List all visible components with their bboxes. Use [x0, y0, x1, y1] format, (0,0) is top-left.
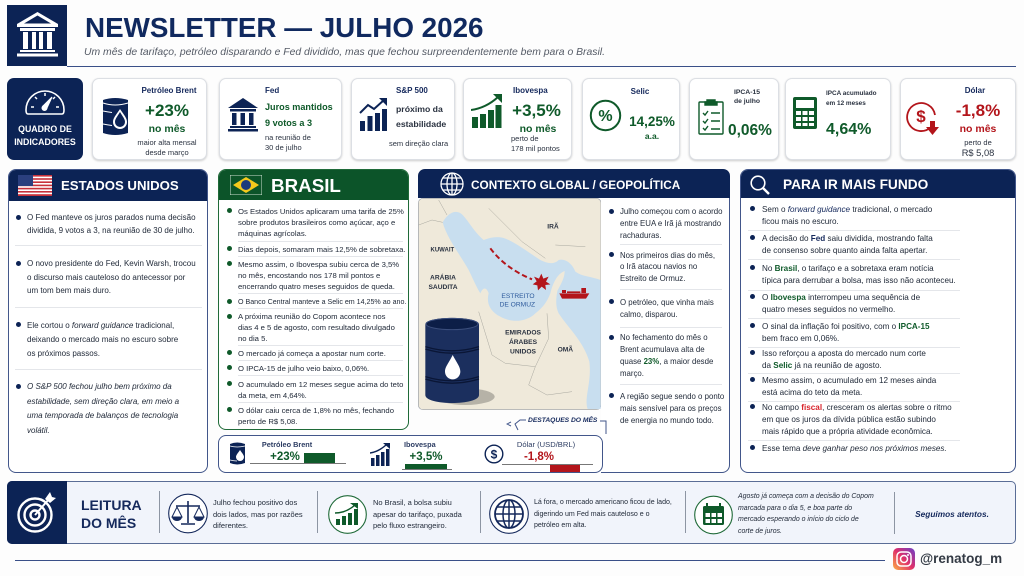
bullet list: da Selic já na reunião de agosto.: [762, 361, 882, 370]
card: dólar: [900, 78, 1016, 160]
bullet list: Mesmo assim, o Ibovespa subiu cerca de 3,5%: [238, 260, 399, 268]
card: fed: [219, 78, 342, 160]
bullet list: Julho começou com o acordo: [620, 207, 722, 216]
item: ibovespa: +3,5%: [410, 451, 442, 463]
bullet list: No Brasil, o tarifaço e a sobretaxa eram notícia: [762, 264, 934, 273]
map labels: [428, 222, 573, 355]
card: ibovespa: [463, 78, 572, 160]
text: [265, 86, 333, 152]
text: no mês: [149, 123, 185, 135]
bullet list: [748, 204, 960, 453]
icon: us flag: [18, 175, 52, 196]
route: [490, 248, 532, 279]
text: [534, 497, 672, 532]
bullet 1: [16, 215, 21, 220]
text 4: O S&P 500 fechou julho bem próximo da: [27, 382, 172, 391]
bullet list: o Irã atacou navios no: [620, 262, 697, 271]
title: CONTEXTO GLOBAL / GEOPOLÍTICA: [471, 178, 680, 192]
bullet list: em que os juros da dívida pública estão subindo: [762, 415, 936, 424]
bullet list: encerrando quatro meses seguidos de queda.: [238, 282, 395, 290]
text: no mês: [520, 123, 556, 135]
note: sem direção clara: [389, 139, 448, 148]
text 4: [27, 382, 179, 435]
icon: globe: [440, 172, 464, 196]
heading: [219, 170, 408, 200]
value: 14,25%: [629, 114, 675, 129]
text 4: uma temporada de balanços de tecnologia: [27, 411, 178, 420]
icon: globe: [489, 494, 529, 534]
title: IPCA acumulado: [826, 90, 877, 97]
title: BRASIL: [271, 175, 341, 196]
bullet list: Os Estados Unidos aplicaram uma tarifa de 25%: [238, 206, 404, 216]
bullet list: mais sensível para os preços: [620, 404, 722, 413]
label: [14, 124, 76, 147]
note: perto de: [511, 134, 539, 143]
text: [956, 86, 1000, 158]
text: Juros mantidos: [265, 102, 333, 112]
item: petróleo brent: +23%: [270, 451, 300, 463]
bullet list: O Ibovespa interrompeu uma sequência de: [762, 293, 920, 302]
text: Agosto já começa com a decisão do Copom: [738, 493, 874, 500]
text 3: Ele cortou o forward guidance tradicional,: [27, 321, 174, 330]
bullet list: ficou mais no escuro.: [762, 216, 839, 226]
text 2: [27, 259, 196, 295]
note: 178 mil pontos: [511, 144, 560, 153]
panel: quadro de indicadores: [7, 78, 83, 160]
icon: oil barrel: [425, 318, 479, 403]
text: digerindo um Fed mais cauteloso e o: [534, 510, 650, 518]
icon: green rising chart: [471, 94, 502, 128]
map labels: KUWAIT: [430, 248, 454, 254]
title: IPCA-15: [734, 89, 760, 96]
panel: brasil: [218, 169, 409, 430]
text: estabilidade: [396, 118, 446, 128]
text: no mês: [960, 123, 996, 135]
bullet list: O acumulado em 12 meses segue acima do teto: [238, 380, 403, 389]
map labels: DE ORMUZ: [500, 302, 535, 309]
text: No Brasil, a bolsa subiu: [373, 498, 452, 507]
bullet list: Esse tema deve ganhar peso nos próximos meses.: [762, 444, 947, 453]
title: ESTADOS UNIDOS: [61, 178, 179, 193]
bullet list: da meta, em 4,64%.: [238, 391, 307, 400]
text: Ibovespa: [513, 86, 548, 95]
panel: para ir mais fundo: [740, 169, 1016, 473]
value: 0,06%: [728, 122, 772, 139]
text: petróleo em alta.: [534, 522, 586, 529]
bullet list: março.: [620, 369, 644, 378]
title: [826, 90, 877, 107]
panel: leitura do mês: [7, 481, 1016, 544]
text 2: o discurso mais cauteloso do antecessor por: [27, 273, 185, 282]
icon: brazil flag: [230, 175, 262, 195]
text: +23%: [145, 101, 189, 120]
text: desde março: [145, 148, 189, 157]
bullet list: O Banco Central manteve a Selic em 14,25% ao ano.: [238, 298, 406, 306]
text: [213, 497, 303, 532]
text: +3,5%: [512, 101, 561, 120]
icon: dollar falling: $: [916, 107, 926, 126]
icon: clipboard: [698, 99, 724, 135]
card: s&p 500: [351, 78, 455, 160]
value: [629, 114, 675, 141]
bullet list: típica para derrubar a bolsa, mas isso não aconteceu.: [762, 276, 956, 285]
bullet list: quase 23%, a maior desde: [620, 357, 713, 366]
text: [373, 497, 462, 532]
bullet list: No fechamento do mês o: [620, 333, 708, 342]
map labels: ESTREITO: [501, 293, 535, 300]
icon: chart: [370, 443, 390, 466]
text: Julho fechou positivo dos: [213, 498, 297, 507]
footer rule: [15, 560, 885, 561]
title: PARA IR MAIS FUNDO: [783, 177, 928, 192]
bullet list: A próxima reunião do Copom acontece nos: [238, 312, 385, 321]
icon: scale: [168, 493, 208, 534]
item: dólar: [502, 440, 593, 472]
text: apesar do tarifaço, puxada: [373, 510, 462, 518]
bullet list: Sem o forward guidance tradicional, o mercado: [762, 204, 932, 214]
icon: calendar: [694, 495, 733, 535]
icon: dollar: [484, 444, 504, 464]
item: ibovespa: [402, 440, 452, 470]
bullet list: no dia 5.: [238, 334, 268, 343]
text: perto de: [964, 138, 992, 147]
bullet list: O IPCA-15 de julho veio baixo, 0,06%.: [238, 364, 369, 373]
bullet list: O petróleo, que vinha mais: [620, 298, 714, 307]
value: 4,64%: [826, 121, 871, 138]
map labels: UNIDOS: [510, 348, 537, 355]
text: S&P 500: [396, 86, 428, 95]
text: na reunião de: [265, 133, 311, 142]
bullet list: [609, 207, 724, 425]
icon: rising chart: [359, 98, 387, 131]
card: ipca acumulado: [785, 78, 891, 160]
shadow: [436, 388, 495, 405]
bullet list: mais rápido que a própria atividade econômica.: [762, 427, 933, 436]
title: de julho: [734, 98, 760, 105]
text: [137, 86, 197, 157]
icon: percent: %: [598, 108, 613, 125]
bullet list: Mesmo assim, o acumulado em 12 meses ainda: [762, 376, 936, 385]
icon: magnifier: [750, 175, 770, 195]
text 1: [27, 213, 196, 235]
map: estreito de ormuz: [418, 198, 601, 410]
title: [734, 89, 760, 105]
bullet list: rachaduras.: [620, 231, 661, 240]
icon: dollar: $: [491, 448, 498, 462]
subtitle: Um mês de tarifaço, petróleo disparando e Fed dividido, mas que fechou surpreendentemente bem para o Brasil.: [84, 47, 605, 58]
bullet list: máquinas agrícolas.: [238, 229, 307, 238]
text: dois lados, mas por razões: [213, 510, 303, 518]
panel: estados unidos: [8, 169, 208, 473]
bullet list: O mercado já começa a apostar num corte.: [238, 349, 386, 358]
icon: calculator: [793, 97, 817, 129]
handle: @renatog_m: [920, 551, 1002, 566]
icon: explosion: [533, 274, 550, 290]
text 3: deixando o mercado mais no escuro sobre: [27, 335, 178, 344]
icon: target: [7, 481, 67, 544]
bullet list: dias 4 e 5 de agosto, com resultado divulgado: [238, 323, 395, 332]
header icon: bank: [7, 5, 67, 66]
icon: barrel: [103, 98, 128, 135]
icon: barrel: [230, 442, 245, 464]
text: mercado esperando o início do ciclo de: [738, 516, 859, 523]
icon: chart: [328, 494, 367, 535]
icon: instagram: [893, 548, 915, 570]
heading: DO MÊS: [81, 515, 136, 531]
item: ibovespa: Ibovespa: [404, 440, 436, 449]
text: [396, 86, 446, 128]
text: maior alta mensal: [137, 138, 197, 147]
heading: [81, 497, 142, 531]
closing note: Seguimos atentos.: [915, 509, 989, 519]
text: pelo fluxo estrangeiro.: [373, 521, 447, 530]
icon: gauge: [25, 90, 65, 115]
bullet list: Estreito de Ormuz.: [620, 274, 685, 283]
bullet list: A decisão do Fed saiu dividida, mostrando falta: [762, 234, 933, 243]
panel: destaques: [218, 435, 603, 473]
bullet list: Dias depois, somaram mais 12,5% de sobretaxa.: [238, 244, 406, 254]
text: R$ 5,08: [962, 148, 994, 158]
text 1: O Fed manteve os juros parados numa decisão: [27, 213, 196, 222]
title: Selic: [631, 87, 649, 96]
bullet list: bem fraco em 0,06%.: [762, 334, 839, 342]
text: Fed: [265, 86, 279, 95]
bullet list: Brent acumulava alta de: [620, 345, 705, 354]
note: [511, 134, 560, 153]
bullet list: entre EUA e Irã já mostrando: [620, 219, 721, 228]
bullet list: de energia no mundo todo.: [620, 416, 714, 425]
icon: dollar falling: [906, 102, 939, 135]
text 4: estabilidade, sem direção clara, em meio a: [27, 397, 179, 406]
bullet list: calmo, disparou.: [620, 310, 678, 319]
bullet list: Nos primeiros dias do mês,: [620, 250, 715, 260]
heading: [741, 170, 1015, 198]
text 3: [27, 321, 178, 358]
right column outline: [601, 198, 730, 473]
bullet 3: [16, 322, 21, 327]
icon: bank: [228, 98, 258, 132]
callout: destaques do mês: DESTAQUES DO MÊS: [528, 417, 597, 424]
card: petróleo brent: [92, 78, 207, 160]
bullet list: [227, 206, 406, 426]
icon: ship: [559, 288, 589, 299]
bullet list: No campo fiscal, cresceram os alertas sobre o ritmo: [762, 403, 952, 412]
map labels: EMIRADOS: [505, 330, 541, 337]
text: 30 de julho: [265, 143, 302, 152]
text: diferentes.: [213, 521, 248, 530]
bullet list: no mês, encostando nos 178 mil pontos e: [238, 270, 380, 280]
text: -1,8%: [956, 101, 1000, 120]
text: marcada para o dia 5, e boa parte do: [738, 504, 852, 512]
text: Petróleo Brent: [141, 86, 197, 95]
heading: LEITURA: [81, 497, 142, 513]
label: INDICADORES: [14, 137, 76, 147]
bullet 2: [16, 261, 21, 266]
heading: [9, 170, 207, 201]
item: dólar: -1,8%: [524, 451, 554, 463]
title: em 12 meses: [826, 100, 866, 107]
bullet list: perto de R$ 5,08.: [238, 417, 297, 426]
map labels: ARÁBIA: [430, 273, 456, 282]
item: petróleo brent: Petróleo Brent: [262, 440, 312, 449]
text 2: O novo presidente do Fed, Kevin Warsh, trocou: [27, 259, 196, 268]
text: Dólar: [965, 86, 985, 95]
bullet list: quatro meses seguidos no vermelho.: [762, 305, 895, 314]
map labels: OMÃ: [558, 344, 573, 353]
text: [738, 491, 874, 537]
text: [512, 86, 561, 135]
icon: percent: [590, 100, 622, 132]
title: NEWSLETTER — JULHO 2026: [85, 12, 484, 43]
bullet list: Isso reforçou a aposta do mercado num corte: [762, 349, 926, 358]
card: ipca-15: [689, 78, 779, 160]
header rule: [67, 66, 1016, 67]
text: corte de juros.: [738, 528, 782, 534]
label: QUADRO DE: [18, 124, 72, 134]
value: a.a.: [645, 131, 659, 141]
map labels: IRÃ: [547, 222, 559, 231]
text 3: os próximos passos.: [27, 349, 100, 358]
bullet list: A região segue sendo o ponto: [620, 392, 724, 401]
item: petróleo brent: [250, 440, 346, 464]
bullet list: O sinal da inflação foi positivo, com o IPCA-15: [762, 322, 930, 330]
bullet 4: [16, 384, 21, 389]
bullet list: de consenso sobre quanto ainda falta apertar.: [762, 246, 927, 255]
text: próximo da: [396, 104, 443, 114]
text 2: um tom bem mais duro.: [27, 286, 111, 295]
text 4: volátil.: [27, 426, 50, 435]
bullet list: está acima do teto da meta.: [762, 388, 862, 397]
map labels: ÁRABES: [509, 337, 538, 346]
panel: contexto global / geopolítica: [418, 169, 730, 473]
text 1: dividida, 9 votos a 3, na reunião de 30 de julho.: [27, 226, 195, 235]
text: 9 votos a 3: [265, 118, 312, 128]
callout: destaques do mês: [506, 416, 606, 434]
card: selic: [582, 78, 680, 160]
text: Lá fora, o mercado americano ficou de lado,: [534, 499, 672, 506]
heading: [418, 169, 730, 198]
item: dólar: Dólar (USD/BRL): [517, 440, 575, 449]
bullet list: sobre produtos brasileiros como açúcar, aço e: [238, 218, 395, 227]
map labels: SAUDITA: [428, 284, 458, 291]
bullet list: O dólar caiu cerca de 1,8% no mês, fechando: [238, 406, 394, 415]
